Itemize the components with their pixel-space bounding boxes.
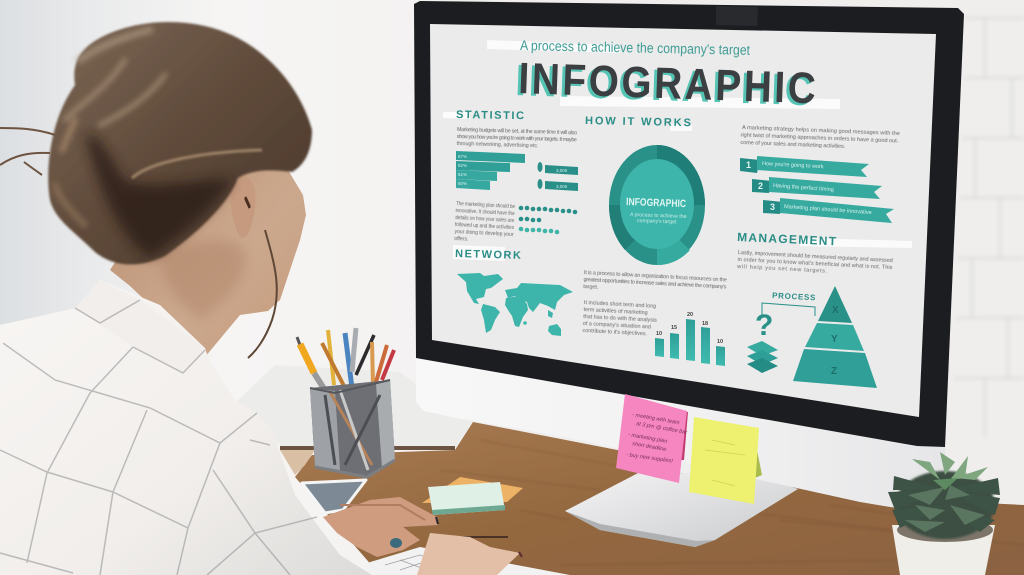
strategy paragraph	[740, 125, 900, 152]
center paragraph	[583, 270, 727, 297]
succulent plant in pot	[888, 452, 1000, 575]
sticky note pink: - marketing plan	[628, 432, 668, 445]
screen	[430, 24, 936, 417]
stack with question mark: ?	[755, 309, 773, 342]
center paragraph: greatest opportunities to increase sales and achieve the company's	[583, 277, 727, 290]
management paragraph: in order for you to know what's beneficial and what is not. This	[737, 257, 893, 271]
tech paragraph: contribute to it's objectives.	[582, 328, 647, 337]
mesh pencil holder	[310, 380, 395, 477]
tech paragraph: term activities of marketing	[583, 307, 648, 316]
woman: hair	[0, 22, 312, 358]
heading subtitle: A process to achieve the company's target	[520, 37, 750, 58]
ribbon steps: 1	[746, 160, 751, 170]
people stats: 3,000	[556, 168, 568, 173]
process pyramid: Y	[831, 334, 838, 345]
process pyramid: PROCESS	[772, 291, 816, 302]
world map	[457, 273, 573, 336]
percentage bars: 82%	[458, 163, 467, 168]
desk	[295, 422, 1024, 575]
hands	[323, 497, 522, 575]
process pyramid: Z	[831, 366, 837, 377]
statistic paragraph	[457, 127, 577, 150]
marketing plan paragraph: offers.	[454, 236, 469, 243]
monitor chin	[416, 355, 945, 516]
percentage bars	[456, 151, 525, 190]
woman: neck and face	[110, 130, 306, 357]
process pyramid	[762, 286, 877, 388]
background wall	[0, 0, 440, 575]
people stats: 3,000	[556, 184, 568, 189]
percentage bars: 50%	[458, 181, 467, 186]
marketing plan paragraph: details on how your sales are	[455, 215, 514, 224]
keyboard	[367, 547, 570, 575]
ribbon steps: How you're going to work	[762, 161, 824, 170]
title INFOGRAPHIC: INFOGRAPHIC	[518, 53, 817, 113]
tech paragraph	[582, 300, 658, 338]
bar chart: 20	[687, 312, 693, 318]
marketing plan paragraph	[454, 201, 515, 245]
ribbon steps: Marketing plan should be innovative	[784, 204, 872, 216]
white highlight strips	[443, 40, 912, 261]
statistic paragraph: through networking, advertising etc.	[457, 141, 539, 149]
tech paragraph: that has to do with the analysis	[583, 314, 657, 324]
tablet	[302, 480, 366, 513]
sticky note pink	[616, 394, 689, 483]
sticky note yellow	[689, 417, 762, 504]
sticky note pink: at 3 pm @ coffee bar	[636, 421, 689, 436]
marketing plan paragraph: your doing to develop your	[454, 229, 514, 238]
ribbon steps: 2	[758, 181, 763, 191]
donut diagram	[609, 145, 705, 265]
statistic paragraph: show you how you're going to work with your targets. It maybe	[457, 134, 577, 143]
strategy paragraph: come of your sales and marketing activities.	[740, 140, 846, 150]
dot rows	[519, 206, 577, 234]
monitor stand	[565, 420, 798, 547]
bar chart: 10	[656, 331, 662, 337]
pencils in holder	[297, 328, 394, 395]
ribbon steps	[740, 156, 894, 223]
bar chart: 10	[717, 339, 723, 345]
heading MANAGEMENT: MANAGEMENT	[737, 230, 838, 248]
sticky note pink: - meeting with team	[632, 412, 680, 426]
marketing plan paragraph: The marketing plan should be	[456, 201, 515, 210]
percentage bars: 87%	[458, 154, 467, 159]
center paragraph: It is a process to allow an organization to focus resources on the	[584, 270, 727, 283]
heading NETWORK: NETWORK	[455, 248, 523, 262]
statistic paragraph: Marketing budgets will be set, at the same time it will also	[457, 127, 577, 136]
management paragraph	[736, 250, 893, 278]
center paragraph: target.	[583, 284, 599, 291]
ribbon steps: Having the perfect timing	[773, 183, 834, 193]
bar chart: 18	[702, 321, 708, 327]
strategy paragraph: A marketing strategy helps on making good messages with the	[742, 125, 900, 137]
people stats	[538, 162, 578, 191]
tech paragraph: It includes short term and long	[584, 300, 656, 310]
stack with question mark	[747, 309, 778, 373]
sticky note pink: short deadline	[632, 441, 667, 453]
marketing plan paragraph: followed up and the activities	[455, 222, 514, 231]
ribbon steps: 3	[770, 202, 775, 212]
sticky note pink: - buy new supplies!	[626, 452, 674, 465]
pen	[447, 536, 508, 538]
pot	[892, 525, 995, 575]
heading STATISTIC: STATISTIC	[456, 109, 526, 122]
title INFOGRAPHIC: INFOGRAPHIC	[515, 55, 814, 115]
donut diagram: company's target	[637, 218, 677, 225]
bar chart	[655, 312, 725, 366]
process pyramid: X	[832, 305, 839, 316]
donut diagram: A process to achieve the	[630, 212, 687, 220]
strategy paragraph: right twist of marketing approaches in orders to have a good out-	[741, 132, 899, 145]
wood grain	[440, 440, 1024, 565]
percentage bars: 61%	[458, 172, 467, 177]
brick wall right	[940, 0, 1024, 510]
monitor bezel	[414, 1, 964, 447]
management paragraph: will help you set new targets.	[736, 264, 827, 275]
woman: plaid shirt	[0, 280, 372, 575]
donut diagram: INFOGRAPHIC	[626, 196, 687, 210]
heading HOW IT WORKS: HOW IT WORKS	[585, 115, 693, 129]
marketing plan paragraph: innovative. It should have the	[456, 208, 515, 217]
stack of sticky pads	[422, 477, 523, 515]
bar chart: 15	[671, 325, 677, 331]
management paragraph: Lastly, improvement should be measured regularly and assessed	[738, 250, 893, 264]
notebook on desk	[237, 365, 473, 475]
tech paragraph: of a company's situation and	[583, 321, 651, 331]
